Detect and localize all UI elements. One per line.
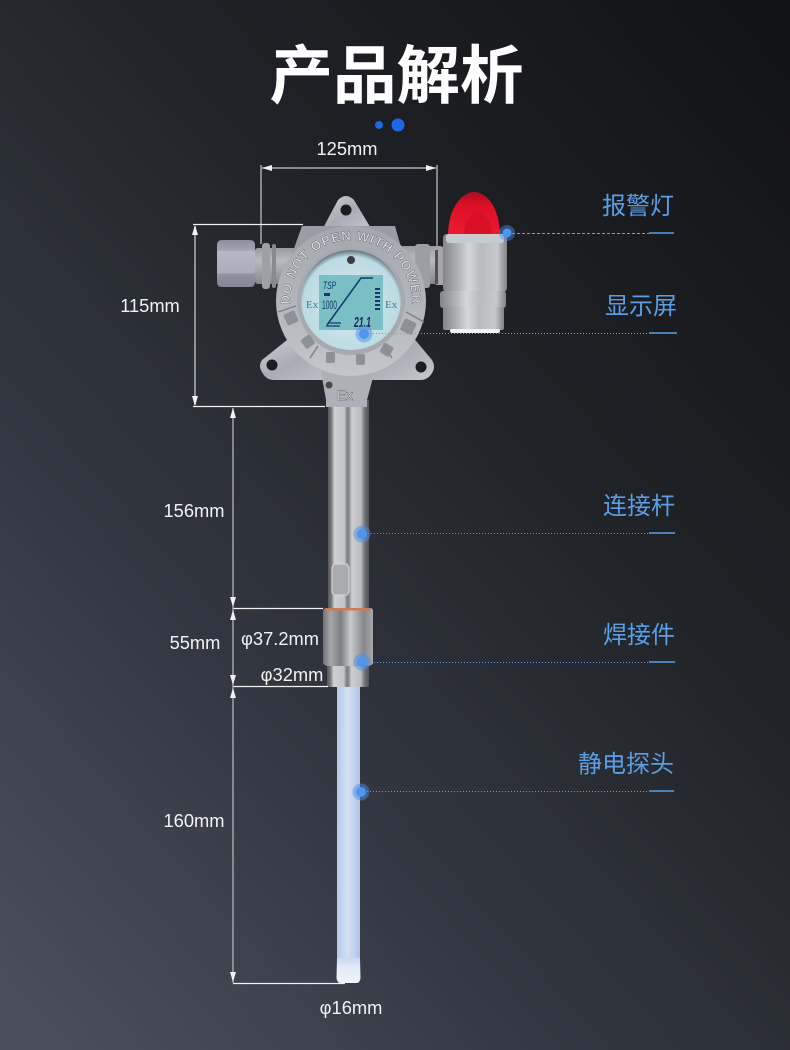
welded part: [323, 608, 373, 687]
callout: 静电探头: 静电探头: [578, 751, 674, 778]
top mounting lug: [322, 196, 372, 230]
callout: 连接杆: [354, 493, 675, 542]
left cable fitting: [217, 240, 305, 289]
callout: 报警灯: [499, 193, 674, 241]
callout: 焊接件: 焊接件: [603, 622, 675, 649]
neck: [320, 366, 376, 407]
Ex marks: [306, 299, 398, 311]
callout: 焊接件: [354, 622, 675, 670]
ring lettering: DO NOT OPEN WITH POWER: [280, 230, 422, 304]
probe: [336, 684, 360, 983]
φ16mm: φ16mm: [320, 997, 382, 1018]
callout: 静电探头: [352, 751, 674, 800]
neck: Ex: [337, 387, 353, 403]
Ex marks: Ex: [385, 299, 398, 311]
title: 产品解析: [270, 42, 524, 112]
window: [301, 250, 401, 350]
alarm lamp: [440, 192, 507, 333]
LCD screen: 1000: [322, 298, 337, 312]
right connector pipe: [400, 244, 444, 288]
callout: 报警灯: 报警灯: [602, 193, 674, 220]
threaded ring: [276, 226, 426, 376]
connecting rod: [328, 400, 369, 609]
156mm: 156mm: [164, 500, 224, 521]
160mm: 160mm: [164, 810, 224, 831]
LCD screen: [319, 275, 383, 331]
title dots: [375, 118, 404, 132]
55mm: 55mm: [170, 632, 220, 653]
lamp dome: [448, 192, 500, 236]
rod clip: [332, 564, 349, 595]
LCD screen: 21.1: [353, 314, 371, 331]
callout: 连接杆: 连接杆: [603, 493, 675, 520]
dimension: width 125mm: 125mm: [317, 138, 377, 159]
LCD screen: TSP: [323, 280, 336, 292]
dimension: width 125mm: [261, 138, 437, 248]
dimension: column heights: [164, 408, 382, 1018]
ring embossed marks: [283, 310, 417, 365]
callout: 显示屏: 显示屏: [605, 293, 677, 320]
shoulders: [292, 226, 403, 254]
lamp body: [443, 234, 507, 292]
φ32mm: φ32mm: [261, 664, 323, 685]
dimension: height 115mm: [120, 224, 325, 406]
dimension: height 115mm: 115mm: [120, 295, 180, 316]
bottom mounting lugs: [260, 336, 434, 380]
Ex marks: Ex: [306, 299, 319, 311]
callout: 显示屏: [356, 293, 677, 342]
explosion-proof housing: [217, 196, 443, 407]
ring segment marks: [278, 306, 424, 358]
φ37.2mm: φ37.2mm: [241, 628, 319, 649]
